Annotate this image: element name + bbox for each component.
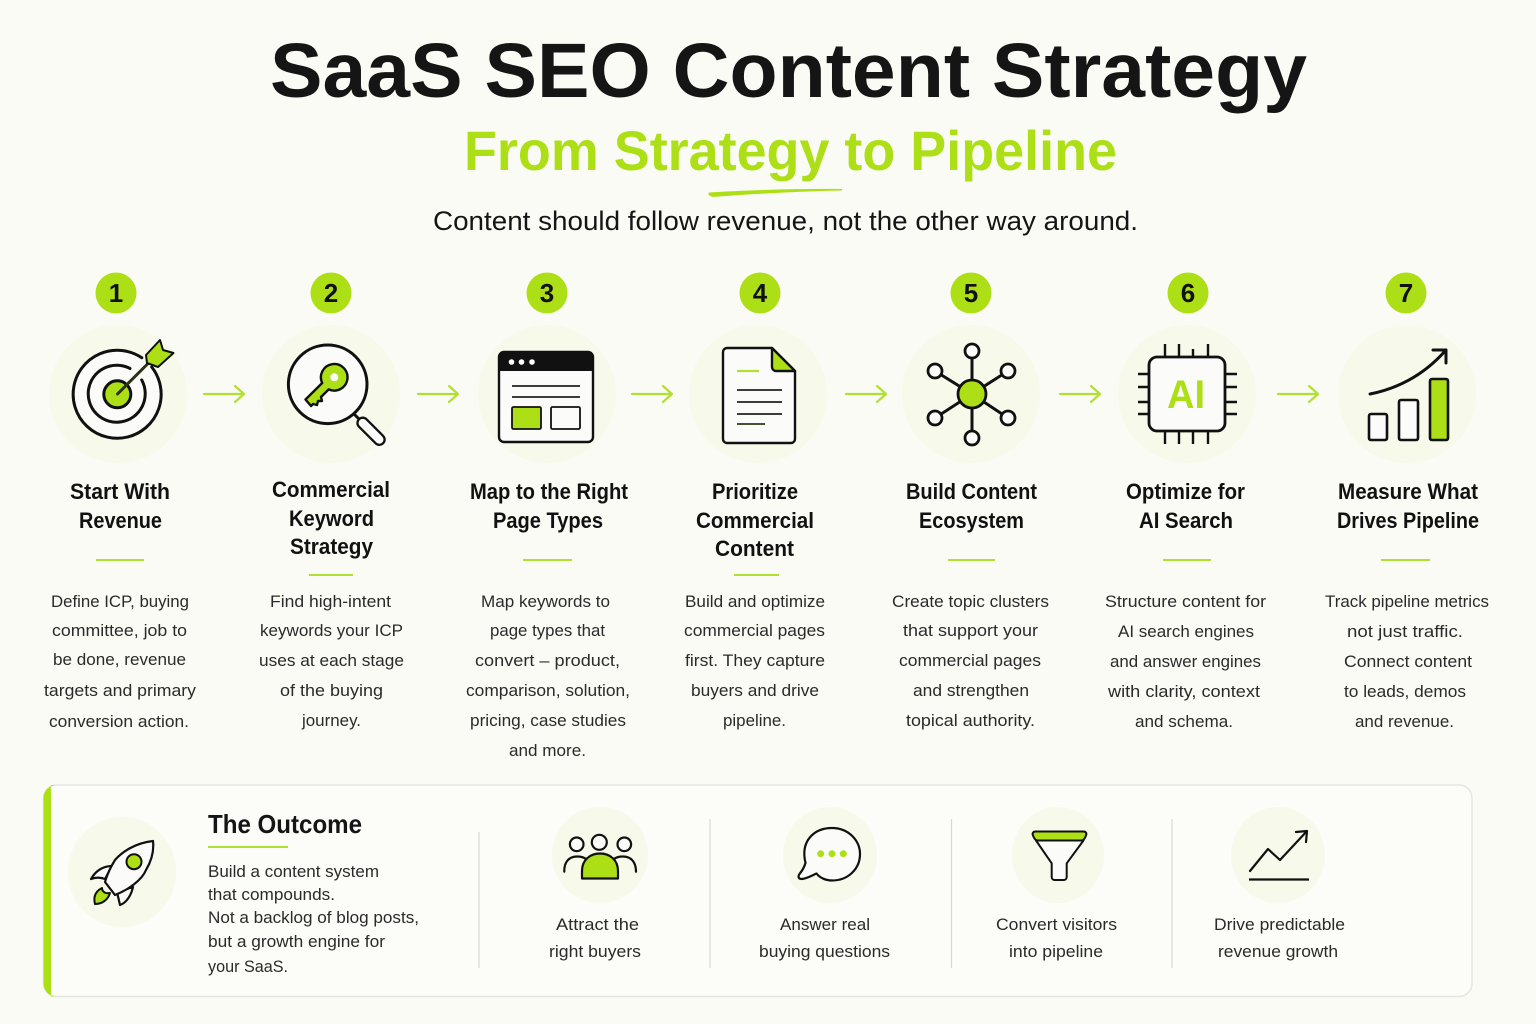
number badge 6 [1168, 272, 1208, 314]
arrow [632, 386, 672, 402]
outcome description: Build a content system [208, 862, 379, 881]
step description [259, 592, 404, 730]
step description: to leads, demos [1344, 682, 1466, 701]
step heading: Page Types [493, 508, 603, 533]
step description: and schema. [1135, 712, 1233, 731]
benefit text [549, 915, 641, 961]
number badge 4: 4 [753, 278, 768, 308]
number badge 3: 3 [540, 278, 554, 308]
step description [1105, 592, 1266, 731]
icon: speech bubble [783, 807, 877, 903]
icon: browser window [478, 325, 616, 463]
step 3: map to the right page types [466, 272, 630, 760]
subtitle: From Strategy to Pipeline [464, 119, 1117, 182]
step description: uses at each stage [259, 651, 404, 670]
step heading [70, 479, 170, 533]
step description [466, 592, 630, 760]
step description: Track pipeline metrics [1325, 592, 1489, 611]
icon: ai chip: AI [1167, 373, 1205, 417]
benefit text [996, 915, 1117, 961]
benefit text: buying questions [759, 942, 890, 961]
number badge 4 [740, 272, 780, 314]
benefit text: Drive predictable [1214, 915, 1345, 934]
tagline: Content should follow revenue, not the other way around. [433, 206, 1138, 236]
step description: conversion action. [49, 712, 189, 731]
step heading: Optimize for [1126, 479, 1245, 504]
step description: first. They capture [685, 651, 825, 670]
step heading: Start With [70, 479, 170, 504]
step description: not just traffic. [1347, 622, 1463, 641]
outcome description: Not a backlog of blog posts, [208, 908, 419, 927]
step description: buyers and drive [691, 681, 819, 700]
step 5: build content ecosystem [892, 272, 1049, 730]
step description: of the buying [280, 681, 383, 700]
benefit text: Attract the [556, 915, 639, 934]
icon: hub network [902, 325, 1040, 463]
step 4: prioritize commercial content [684, 272, 827, 730]
icon: magnifier with key [262, 325, 400, 463]
benefit text: into pipeline [1009, 942, 1103, 961]
number badge 7: 7 [1399, 278, 1413, 308]
step heading: Commercial [696, 508, 814, 533]
step description: Connect content [1344, 652, 1472, 671]
benefit: attract the right buyers [549, 807, 648, 961]
step description: and answer engines [1110, 652, 1261, 671]
benefit text: revenue growth [1218, 942, 1338, 961]
step description: comparison, solution, [466, 681, 630, 700]
number badge 1: 1 [109, 278, 123, 308]
icon: ai chip [1118, 325, 1256, 463]
step description: Build and optimize [685, 592, 825, 611]
step description: and more. [509, 741, 586, 760]
step description: topical authority. [906, 711, 1035, 730]
number badge 2 [310, 272, 352, 314]
step heading: Measure What [1338, 479, 1479, 504]
step heading [906, 479, 1038, 533]
outcome heading: The Outcome [208, 809, 362, 839]
number badge 6: 6 [1181, 278, 1195, 308]
subtitle underline [708, 189, 842, 197]
step heading: Keyword [289, 506, 374, 531]
number badge 3 [526, 272, 568, 314]
benefit text: Convert visitors [996, 915, 1117, 934]
step description [892, 592, 1049, 730]
icon: funnel [1012, 807, 1104, 903]
number badge 5: 5 [964, 278, 978, 308]
step heading: Content [715, 536, 795, 561]
step heading: Build Content [906, 479, 1038, 504]
step heading: Map to the Right [470, 479, 629, 504]
step 6: optimize for ai search [1105, 272, 1266, 731]
arrow [1060, 386, 1100, 402]
arrow [418, 386, 458, 402]
benefit text: right buyers [549, 942, 641, 961]
icon: rocket [68, 817, 176, 927]
step heading [1126, 479, 1245, 533]
icon: document [689, 325, 827, 463]
panel: the outcome [44, 785, 1472, 996]
step description: pricing, case studies [470, 711, 626, 730]
step description: and strengthen [913, 681, 1029, 700]
icon: target with arrow [49, 325, 187, 463]
step description [684, 592, 825, 730]
step description: Create topic clusters [892, 592, 1049, 611]
step heading: Revenue [79, 508, 162, 533]
step heading: Drives Pipeline [1337, 508, 1479, 533]
step description: pipeline. [723, 711, 786, 730]
step heading: AI Search [1139, 508, 1233, 533]
benefit: answer real buying questions [759, 807, 890, 961]
step description: page types that [490, 621, 605, 640]
number badge 1 [96, 272, 136, 314]
step heading: Commercial [272, 477, 390, 502]
title: SaaS SEO Content Strategy [270, 28, 1307, 114]
benefit text [759, 915, 890, 961]
icon: people group [552, 807, 648, 903]
number badge 2: 2 [324, 278, 338, 308]
benefit: drive predictable revenue growth [1214, 807, 1345, 961]
arrow [1278, 386, 1318, 402]
step description: targets and primary [44, 681, 197, 700]
step description: keywords your ICP [260, 621, 403, 640]
step description: convert – product, [475, 651, 620, 670]
step heading [272, 477, 390, 559]
step description: that support your [903, 621, 1038, 640]
step description: Map keywords to [481, 592, 610, 611]
arrow [204, 386, 244, 402]
outcome description: your SaaS. [208, 957, 288, 976]
step description: commercial pages [684, 621, 825, 640]
outcome description [208, 862, 419, 976]
step heading: Prioritize [712, 479, 798, 504]
outcome description: but a growth engine for [208, 932, 385, 951]
step 1: start with revenue [44, 272, 197, 731]
icon: rising bar chart [1338, 325, 1476, 463]
step description [44, 592, 197, 731]
step description: Find high-intent [270, 592, 391, 611]
step description: commercial pages [899, 651, 1041, 670]
step description: committee, job to [52, 621, 187, 640]
step description: and revenue. [1355, 712, 1454, 731]
arrow [846, 386, 886, 402]
benefit text [1214, 915, 1345, 961]
step description [1325, 592, 1489, 731]
benefit text: Answer real [780, 915, 870, 934]
step heading [696, 479, 814, 561]
step heading: Strategy [290, 534, 374, 559]
step heading: Ecosystem [919, 508, 1024, 533]
step 7: measure what drives pipeline [1325, 272, 1489, 731]
number badge 7 [1386, 272, 1426, 314]
benefit: convert visitors into pipeline [996, 807, 1117, 961]
step 2: commercial keyword strategy [259, 272, 404, 730]
outcome description: that compounds. [208, 885, 335, 904]
step description: Define ICP, buying [51, 592, 189, 611]
number badge 5 [950, 272, 992, 314]
step heading [1337, 479, 1479, 533]
icon: growth line [1231, 807, 1325, 903]
step description: AI search engines [1118, 622, 1254, 641]
step description: with clarity, context [1107, 682, 1260, 701]
step description: be done, revenue [53, 650, 186, 669]
step heading [470, 479, 629, 533]
step description: journey. [301, 711, 361, 730]
step description: Structure content for [1105, 592, 1266, 611]
